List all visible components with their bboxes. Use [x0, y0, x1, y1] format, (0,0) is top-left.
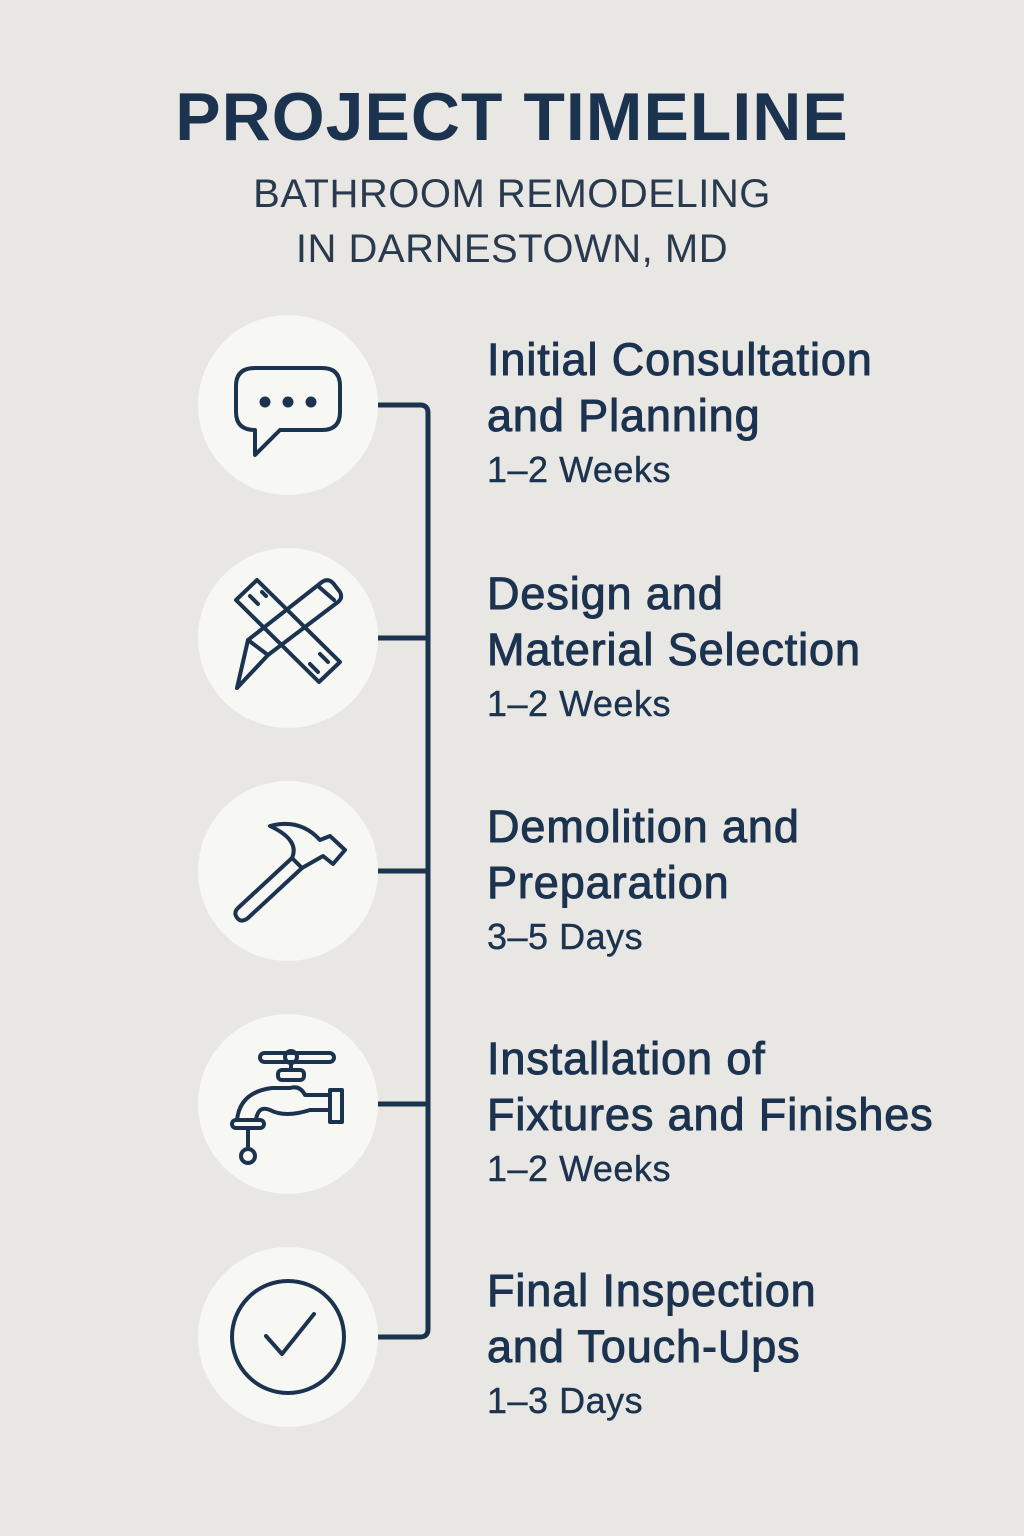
title: PROJECT TIMELINE	[175, 79, 849, 155]
icon: check circle	[198, 1247, 378, 1427]
step 3: 3–5 Days	[487, 916, 643, 957]
icon: pencil and ruler	[198, 548, 378, 728]
step 3	[487, 801, 800, 957]
step 4: Installation of	[487, 1033, 766, 1084]
subtitle	[253, 172, 771, 271]
step 4	[487, 1033, 934, 1189]
step 5: Final Inspection	[487, 1265, 817, 1316]
step 5: 1–3 Days	[487, 1380, 643, 1421]
step 2: 1–2 Weeks	[487, 683, 671, 724]
step 4: 1–2 Weeks	[487, 1148, 671, 1189]
step 1: Initial Consultation	[487, 334, 873, 385]
step 1: 1–2 Weeks	[487, 449, 671, 490]
step 5	[487, 1265, 817, 1421]
step 5: and Touch-Ups	[487, 1321, 801, 1372]
subtitle: IN DARNESTOWN, MD	[296, 227, 728, 271]
step 3: Demolition and	[487, 801, 800, 852]
timeline connector	[378, 405, 428, 1337]
step 4: Fixtures and Finishes	[487, 1089, 934, 1140]
subtitle: BATHROOM REMODELING	[253, 172, 771, 216]
step 2: Design and	[487, 568, 724, 619]
step 2: Material Selection	[487, 624, 861, 675]
icon: faucet	[198, 1014, 378, 1194]
icon: chat bubble	[198, 315, 378, 495]
step 1	[487, 334, 873, 490]
step 1: and Planning	[487, 390, 761, 441]
step 3: Preparation	[487, 857, 730, 908]
icon: hammer	[198, 781, 378, 961]
step 2	[487, 568, 861, 724]
